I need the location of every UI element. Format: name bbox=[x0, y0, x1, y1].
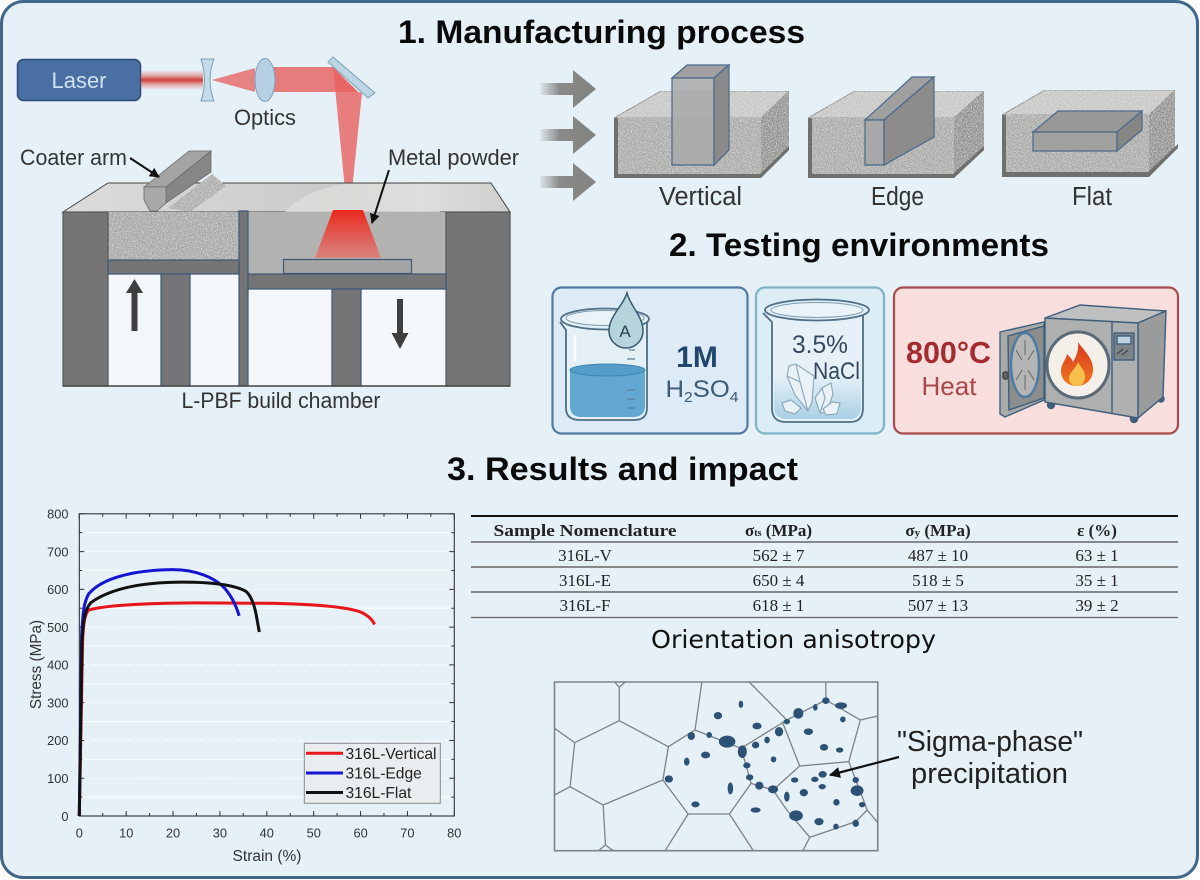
table rules bbox=[471, 516, 1178, 618]
table: mechanical properties bbox=[471, 516, 1178, 618]
coater arm bbox=[144, 151, 211, 211]
callout: sigma-phase precipitation: precipitation bbox=[911, 758, 1068, 790]
lower chamber cavities bbox=[108, 274, 446, 386]
label: vertical: Vertical bbox=[659, 183, 742, 211]
table header: σy (MPa) bbox=[905, 521, 971, 540]
label: edge: Edge bbox=[871, 183, 924, 211]
arrow: metal powder bbox=[372, 170, 389, 223]
powder block: edge orientation bbox=[808, 77, 984, 211]
y axis tick labels: 800 bbox=[47, 506, 68, 522]
arrow: build piston down bbox=[392, 299, 408, 349]
heading: results and impact: 3. Results and impact bbox=[447, 451, 798, 487]
heading: testing environments: 2. Testing environments bbox=[669, 227, 1049, 263]
powder feed left bbox=[108, 212, 239, 260]
diagram: grain structure with sigma-phase precipitates bbox=[554, 682, 878, 851]
label: heat: Heat bbox=[922, 371, 977, 401]
x axis tick labels: 40 bbox=[260, 826, 274, 840]
table row: 316L-V: 562 ± 7 bbox=[753, 546, 805, 565]
furnace door bbox=[1000, 322, 1044, 417]
label: flat: Flat bbox=[1072, 183, 1112, 211]
table row: 316L-V: 63 ± 1 bbox=[1075, 546, 1119, 565]
x axis title: Strain (%) bbox=[233, 848, 301, 865]
control panel bbox=[1114, 333, 1134, 360]
x axis tick labels bbox=[76, 826, 461, 840]
chart legend bbox=[304, 743, 440, 803]
specimen: vertical bbox=[672, 65, 729, 165]
label: 3.5%: 3.5% bbox=[792, 331, 848, 359]
label: H2SO4: 4 bbox=[730, 389, 738, 406]
table row: 316L-E: 35 ± 1 bbox=[1075, 571, 1119, 590]
arrow: feed piston up bbox=[126, 279, 143, 331]
x axis tick labels: 50 bbox=[307, 826, 321, 840]
specimen: flat bbox=[1033, 111, 1142, 151]
panel: salt solution bbox=[756, 288, 884, 434]
y axis tick labels: 300 bbox=[47, 696, 68, 710]
x axis tick labels: 10 bbox=[119, 826, 133, 840]
specimen: edge bbox=[865, 77, 934, 165]
chart plot frame bbox=[79, 514, 454, 816]
curve: 316L-Flat bbox=[79, 582, 259, 816]
label: 1M: 1M bbox=[676, 341, 718, 374]
callout: sigma-phase precipitation: "Sigma-phase" bbox=[897, 726, 1083, 758]
chamber top surface bbox=[63, 183, 510, 212]
chart legend: 316L-Flat bbox=[346, 785, 412, 802]
table row: 316L-F bbox=[560, 596, 1119, 615]
table row: 316L-F: 618 ± 1 bbox=[753, 596, 804, 615]
label: H2SO4: H bbox=[666, 376, 683, 403]
y axis tick labels: 600 bbox=[47, 582, 68, 597]
chart axis ticks bbox=[79, 513, 455, 816]
x axis tick labels: 80 bbox=[447, 826, 461, 840]
sigma-phase precipitates bbox=[665, 697, 865, 830]
build plate bbox=[284, 260, 412, 274]
x axis tick labels: 0 bbox=[76, 826, 83, 840]
table header: ε (%) bbox=[1077, 521, 1117, 540]
surface highlight bbox=[285, 184, 440, 212]
y axis tick labels bbox=[47, 506, 68, 824]
melt zone bbox=[315, 210, 381, 258]
chamber walls and pistons bbox=[63, 211, 510, 386]
y axis tick labels: 400 bbox=[47, 658, 68, 673]
laser beam path bbox=[141, 67, 362, 210]
y axis tick labels: 700 bbox=[47, 544, 68, 559]
curve: 316L-Vertical bbox=[79, 603, 375, 816]
y axis title: Stress (MPa) bbox=[28, 620, 45, 709]
table header: Sample Nomenclature bbox=[494, 521, 677, 540]
mirror bbox=[328, 57, 375, 98]
arrow: coater arm bbox=[130, 158, 159, 177]
curve: 316L-Edge bbox=[79, 570, 239, 816]
table row: 316L-F: 316L-F bbox=[560, 596, 610, 615]
label: metal powder: Metal powder bbox=[388, 145, 519, 170]
arrow: sigma-phase bbox=[830, 757, 899, 775]
icon: furnace bbox=[1000, 305, 1166, 422]
chart legend: 316L-Edge bbox=[346, 766, 422, 782]
table row: 316L-E bbox=[559, 571, 1119, 590]
table row: 316L-E: 316L-E bbox=[559, 571, 611, 590]
panel: heat bbox=[894, 288, 1178, 434]
powder block: flat orientation bbox=[1002, 90, 1178, 211]
chart legend: 316L-Vertical bbox=[346, 746, 437, 763]
x axis tick labels: 30 bbox=[213, 826, 227, 840]
label: NaCl: NaCl bbox=[813, 358, 860, 385]
laser source: Laser bbox=[51, 68, 107, 93]
x axis tick labels: 60 bbox=[353, 826, 368, 840]
label: H2SO4: 2 bbox=[684, 389, 693, 406]
x axis tick labels: 20 bbox=[166, 826, 180, 840]
y axis tick labels: 0 bbox=[61, 809, 68, 824]
optics lenses bbox=[201, 58, 296, 130]
table row: 316L-E: 518 ± 5 bbox=[912, 571, 964, 590]
title: manufacturing process: 1. Manufacturing process bbox=[398, 14, 805, 50]
y axis tick labels: 200 bbox=[47, 733, 68, 748]
callout: sigma-phase precipitation bbox=[830, 726, 1083, 790]
table row: 316L-V bbox=[558, 546, 1119, 565]
chart faint white guide lines bbox=[82, 533, 450, 797]
subheading: orientation anisotropy: Orientation anisotropy bbox=[651, 625, 936, 654]
table row: 316L-E: 650 ± 4 bbox=[753, 571, 805, 590]
table row: 316L-F: 507 ± 13 bbox=[908, 596, 968, 615]
icon: beaker with acid bbox=[560, 293, 649, 420]
label: 800°C: 800°C bbox=[906, 335, 991, 370]
grain boundary network bbox=[554, 682, 878, 851]
table row: 316L-F: 39 ± 2 bbox=[1075, 596, 1119, 615]
icon: beaker with salt crystals bbox=[763, 300, 869, 422]
table row: 316L-V: 316L-V bbox=[558, 546, 613, 565]
powder spread bbox=[168, 174, 226, 212]
optics lenses: Optics bbox=[234, 105, 296, 130]
table header: σts (MPa) bbox=[745, 521, 812, 540]
icon: acid droplet: A bbox=[619, 322, 631, 341]
panel: sulfuric acid bbox=[552, 288, 748, 434]
arrows: build direction bbox=[540, 70, 596, 201]
table row: 316L-V: 487 ± 10 bbox=[908, 546, 968, 565]
label: chamber: L-PBF build chamber bbox=[182, 388, 380, 413]
table header bbox=[494, 521, 1117, 540]
chart: stress-strain curves bbox=[28, 506, 461, 865]
icon: flame bbox=[1061, 342, 1093, 386]
furnace window bbox=[1047, 332, 1109, 398]
label: H2SO4: SO bbox=[693, 376, 730, 403]
laser source bbox=[18, 60, 140, 100]
panel: L-PBF build chamber diagram bbox=[18, 57, 519, 413]
powder block: vertical orientation bbox=[614, 65, 789, 211]
chamber base line bbox=[63, 385, 510, 387]
label: coater arm: Coater arm bbox=[20, 145, 127, 170]
powder bed right bbox=[248, 212, 446, 274]
y axis tick labels: 100 bbox=[47, 771, 68, 786]
x axis tick labels: 70 bbox=[400, 826, 415, 840]
curves bbox=[79, 570, 375, 816]
y axis tick labels: 500 bbox=[47, 620, 68, 635]
